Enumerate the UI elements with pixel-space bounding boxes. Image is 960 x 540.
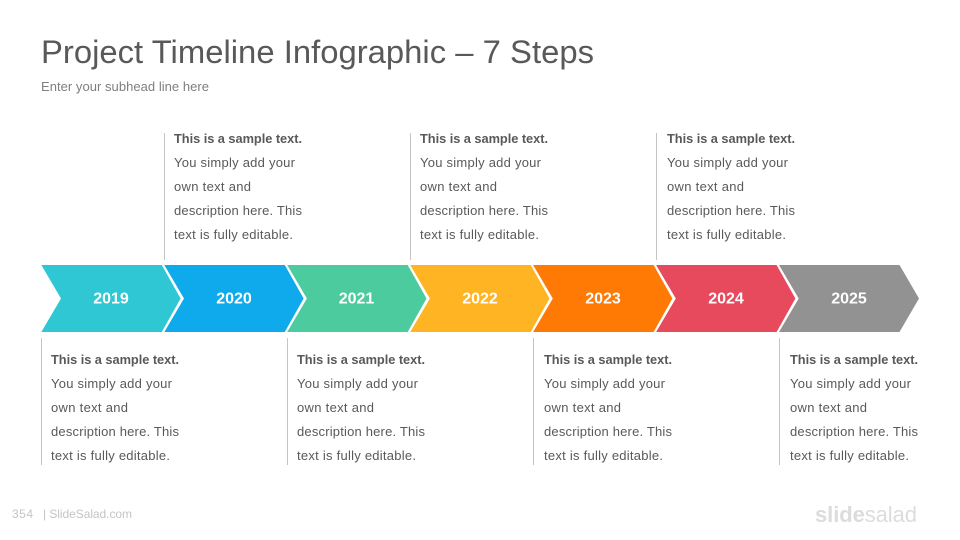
chevron: 2022: 2022: [462, 290, 498, 308]
text block: 2024: [656, 131, 796, 260]
chevron: 2022: [410, 265, 550, 332]
text block: 2025: description here. This: [790, 424, 918, 439]
text block: 2020: [164, 131, 302, 260]
text block: 2022: description here. This: [420, 203, 548, 218]
chevron: 2025: 2025: [831, 290, 867, 308]
chevron: 2023: [533, 265, 672, 332]
subhead: Enter your subhead line here: [41, 79, 209, 94]
text block: 2019: This is a sample text.: [51, 352, 179, 367]
chevron: 2021: 2021: [339, 290, 374, 308]
chevron: 2021: [287, 265, 426, 332]
chevron: 2020: [164, 265, 304, 332]
text block: 2024: own text and: [667, 179, 744, 194]
text block: 2022: You simply add your: [420, 155, 542, 170]
chevron: 2019: 2019: [93, 290, 129, 308]
text block: 2020: text is fully editable.: [174, 227, 293, 242]
text block: 2025: You simply add your: [790, 376, 912, 391]
page number: 354: [12, 507, 33, 521]
text block: 2021: description here. This: [297, 424, 426, 439]
text block: 2022: This is a sample text.: [420, 131, 548, 146]
text block: 2020: You simply add your: [174, 155, 296, 170]
text block: 2022: own text and: [420, 179, 497, 194]
logo: slidesalad: slidesalad: [815, 502, 917, 527]
text block: 2022: text is fully editable.: [420, 227, 539, 242]
text block: 2024: description here. This: [667, 203, 796, 218]
text block: 2023: This is a sample text.: [544, 352, 672, 367]
text block: 2020: This is a sample text.: [174, 131, 302, 146]
text block: 2021: [288, 338, 426, 465]
text block: 2025: text is fully editable.: [790, 448, 909, 463]
text block: 2020: own text and: [174, 179, 251, 194]
footer source: | SlideSalad.com: [43, 507, 132, 521]
text block: 2019: [42, 338, 180, 465]
text block: 2024: This is a sample text.: [667, 131, 795, 146]
text block: 2025: own text and: [790, 400, 867, 415]
chevron: 2025: [779, 265, 919, 332]
text block: 2021: own text and: [297, 400, 374, 415]
text block: 2020: description here. This: [174, 203, 302, 218]
text block: 2023: own text and: [544, 400, 621, 415]
text block: 2019: description here. This: [51, 424, 180, 439]
text block: 2023: description here. This: [544, 424, 672, 439]
chevron: 2020: 2020: [216, 290, 252, 308]
text block: 2023: [534, 338, 672, 465]
text block: 2025: [780, 338, 918, 465]
text block: 2021: This is a sample text.: [297, 352, 425, 367]
chevron: 2024: [656, 265, 795, 332]
text block: 2022: [410, 131, 548, 260]
text block: 2021: You simply add your: [297, 376, 419, 391]
chevron: 2024: 2024: [708, 290, 744, 308]
text block: 2024: text is fully editable.: [667, 227, 786, 242]
text block: 2021: text is fully editable.: [297, 448, 416, 463]
text block: 2023: You simply add your: [544, 376, 666, 391]
chevron: 2023: 2023: [585, 290, 621, 308]
text block: 2019: text is fully editable.: [51, 448, 170, 463]
title: Project Timeline Infographic – 7 Steps: [41, 33, 594, 70]
text block: 2023: text is fully editable.: [544, 448, 663, 463]
text block: 2019: own text and: [51, 400, 128, 415]
chevron: 2019: [41, 265, 181, 332]
text block: 2024: You simply add your: [667, 155, 789, 170]
text block: 2025: This is a sample text.: [790, 352, 918, 367]
text block: 2019: You simply add your: [51, 376, 173, 391]
